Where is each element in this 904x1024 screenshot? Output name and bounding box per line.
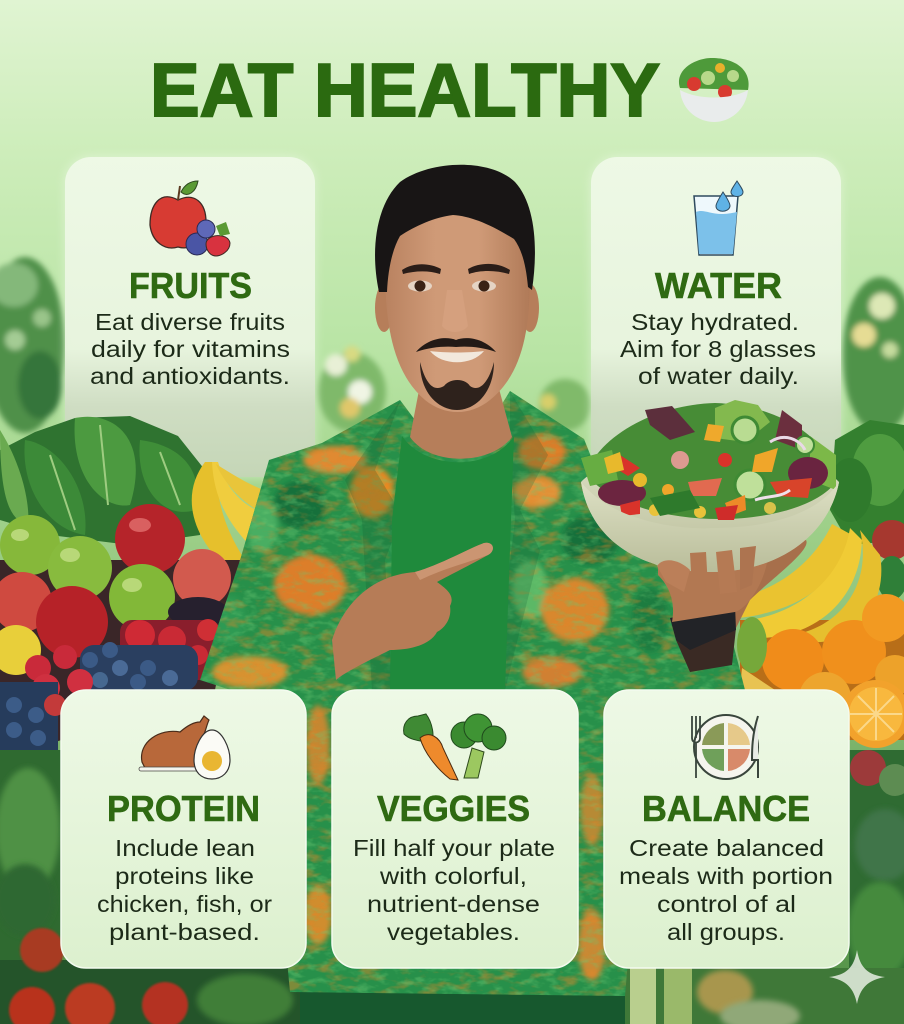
lower right greens xyxy=(849,750,904,1024)
trousers xyxy=(300,975,625,1024)
smile xyxy=(430,351,484,362)
body text: Include lean xyxy=(115,835,255,861)
heading: BALANCE xyxy=(642,788,810,829)
jacket xyxy=(195,390,755,1000)
t-shirt xyxy=(390,436,514,690)
body text: all groups. xyxy=(667,919,785,945)
person xyxy=(195,165,755,1024)
bananas right xyxy=(735,524,852,618)
eyebrows xyxy=(402,264,441,274)
panel: fruits xyxy=(65,157,315,477)
leafy greens right xyxy=(828,420,904,545)
icon: sparkle xyxy=(829,950,885,1004)
icon: carrot and broccoli xyxy=(404,714,506,780)
face xyxy=(385,214,530,412)
title: EAT HEALTHY xyxy=(150,48,660,132)
body text: vegetables. xyxy=(387,919,520,945)
body text: with colorful, xyxy=(379,863,527,889)
body text xyxy=(353,835,555,945)
bowl back xyxy=(581,450,839,572)
ears xyxy=(375,284,393,332)
icon: chicken and egg xyxy=(139,716,230,779)
apples xyxy=(0,515,60,575)
neck xyxy=(410,385,512,459)
body text: plant-based. xyxy=(109,919,260,945)
panel: protein xyxy=(61,690,306,968)
watch xyxy=(670,605,736,650)
body text: of water daily. xyxy=(638,363,799,389)
forearm sleeve xyxy=(676,628,736,672)
panel: water xyxy=(591,157,841,477)
body text: Stay hydrated. xyxy=(631,309,799,335)
hand xyxy=(658,556,768,622)
hair xyxy=(375,165,535,292)
orange slice xyxy=(842,680,904,748)
body text: Eat diverse fruits xyxy=(95,309,285,335)
heading: WATER xyxy=(655,265,782,306)
icon: apple and berries xyxy=(150,181,230,256)
body text: daily for vitamins xyxy=(91,336,290,362)
body text xyxy=(619,835,833,945)
icon: plate with fork and knife xyxy=(692,715,758,779)
panel: balance xyxy=(604,690,849,968)
body text: proteins like xyxy=(115,863,254,889)
body text: control of al xyxy=(657,891,796,917)
icon: water glass xyxy=(694,181,743,255)
base of fruit pile xyxy=(0,560,240,760)
nose xyxy=(442,290,468,332)
salad mound xyxy=(586,403,836,519)
berries xyxy=(168,597,228,627)
pointing hand xyxy=(332,543,493,680)
panel: veggies xyxy=(332,690,578,968)
forearm behind bowl xyxy=(676,540,807,640)
body text xyxy=(620,309,816,389)
oranges xyxy=(762,629,824,691)
bananas left xyxy=(192,462,245,578)
moustache and goatee xyxy=(416,338,496,352)
body text: Fill half your plate xyxy=(353,835,555,861)
body text: and antioxidants. xyxy=(90,363,290,389)
salad bowl in hand xyxy=(581,400,839,672)
eyes xyxy=(408,280,432,292)
heading: FRUITS xyxy=(129,265,252,306)
body text: Create balanced xyxy=(629,835,824,861)
body text: chicken, fish, or xyxy=(97,891,272,917)
body text xyxy=(97,835,272,945)
fingers on bowl xyxy=(657,560,690,592)
heading: VEGGIES xyxy=(377,788,530,829)
leafy greens left xyxy=(0,416,205,545)
body text xyxy=(90,309,290,389)
bowl front xyxy=(581,482,839,572)
background: left produce pile xyxy=(0,416,264,760)
body text: Aim for 8 glasses xyxy=(620,336,816,362)
background: bottom left vegetables xyxy=(0,750,310,1024)
background: blurred foliage xyxy=(0,257,904,433)
body text: nutrient-dense xyxy=(367,891,540,917)
body text: meals with portion xyxy=(619,863,833,889)
background: right produce pile xyxy=(625,420,904,1024)
heading: PROTEIN xyxy=(107,788,260,829)
icon: salad bowl xyxy=(679,58,749,122)
